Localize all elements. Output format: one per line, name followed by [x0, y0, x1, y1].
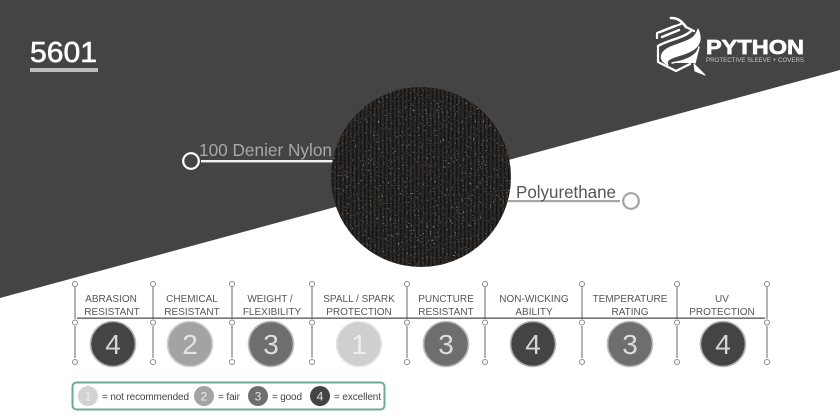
rating: non-wicking ability 4: 4	[525, 329, 541, 360]
rating: abrasion resistant 4	[84, 294, 140, 366]
legend item: excellent: = excellent	[334, 392, 381, 403]
icon: python hexagon	[657, 18, 705, 75]
rating: UV protection 4: PROTECTION	[689, 307, 755, 318]
rating: spall / spark protection 1	[323, 294, 395, 366]
legend	[72, 382, 384, 410]
rating: non-wicking ability 4	[499, 294, 569, 366]
rating: spall / spark protection 1: 1	[351, 329, 367, 360]
title: product code 5601: 5601	[30, 37, 97, 69]
legend item: excellent: 4	[317, 390, 324, 404]
wordmark: PYTHON	[706, 37, 804, 59]
rating: chemical resistant 2: 2	[182, 329, 198, 360]
rating: temperature rating 3: 3	[622, 329, 638, 360]
rating: spall / spark protection 1: PROTECTION	[326, 307, 392, 318]
callout: Polyurethane	[505, 182, 639, 209]
rating: temperature rating 3	[593, 294, 668, 366]
column dividers	[72, 282, 770, 364]
rating: puncture resistant 3: 3	[438, 329, 454, 360]
rating: temperature rating 3: TEMPERATURE	[593, 294, 668, 305]
rating: puncture resistant 3: RESISTANT	[418, 307, 474, 318]
tagline: PROTECTIVE SLEEVE + COVERS	[706, 57, 805, 64]
legend item: good	[248, 386, 302, 406]
rating: puncture resistant 3: PUNCTURE	[418, 294, 474, 305]
ratings chart	[72, 282, 770, 366]
rating: UV protection 4	[689, 294, 755, 366]
rating: abrasion resistant 4: 4	[105, 329, 121, 360]
rating: weight / flexibility 3: WEIGHT /	[247, 294, 293, 305]
callout: 100 Denier Nylon	[183, 140, 333, 169]
rating: temperature rating 3: RATING	[611, 307, 649, 318]
callout: 100 Denier Nylon: 100 Denier Nylon	[199, 140, 332, 160]
legend item: not recommended	[78, 386, 189, 406]
callout: Polyurethane: Polyurethane	[516, 182, 616, 202]
legend item: fair	[194, 386, 241, 406]
legend item: fair: = fair	[218, 392, 241, 403]
rating: weight / flexibility 3: 3	[263, 329, 279, 360]
fabric swatch	[331, 87, 511, 267]
legend item: not recommended: = not recommended	[102, 392, 189, 403]
rating: UV protection 4: 4	[715, 329, 731, 360]
rating: chemical resistant 2	[164, 294, 220, 366]
rating: abrasion resistant 4: RESISTANT	[84, 307, 140, 318]
rating: chemical resistant 2: CHEMICAL	[166, 294, 218, 305]
rating: spall / spark protection 1: SPALL / SPARK	[323, 294, 395, 305]
rating: non-wicking ability 4: ABILITY	[515, 307, 553, 318]
rating: UV protection 4: UV	[715, 294, 729, 305]
rating: abrasion resistant 4: ABRASION	[85, 294, 137, 305]
rating: puncture resistant 3	[418, 294, 474, 366]
legend item: not recommended: 1	[85, 390, 92, 404]
rating: weight / flexibility 3	[243, 294, 302, 366]
rating: non-wicking ability 4: NON-WICKING	[499, 294, 569, 305]
background: dark diagonal panel	[0, 0, 840, 298]
legend item: good: 3	[255, 390, 262, 404]
rating: weight / flexibility 3: FLEXIBILITY	[243, 307, 302, 318]
rating: chemical resistant 2: RESISTANT	[164, 307, 220, 318]
legend item: fair: 2	[201, 390, 208, 404]
legend item: excellent	[310, 386, 381, 406]
logo: Python protective sleeve and covers	[657, 18, 805, 75]
legend item: good: = good	[272, 392, 302, 403]
